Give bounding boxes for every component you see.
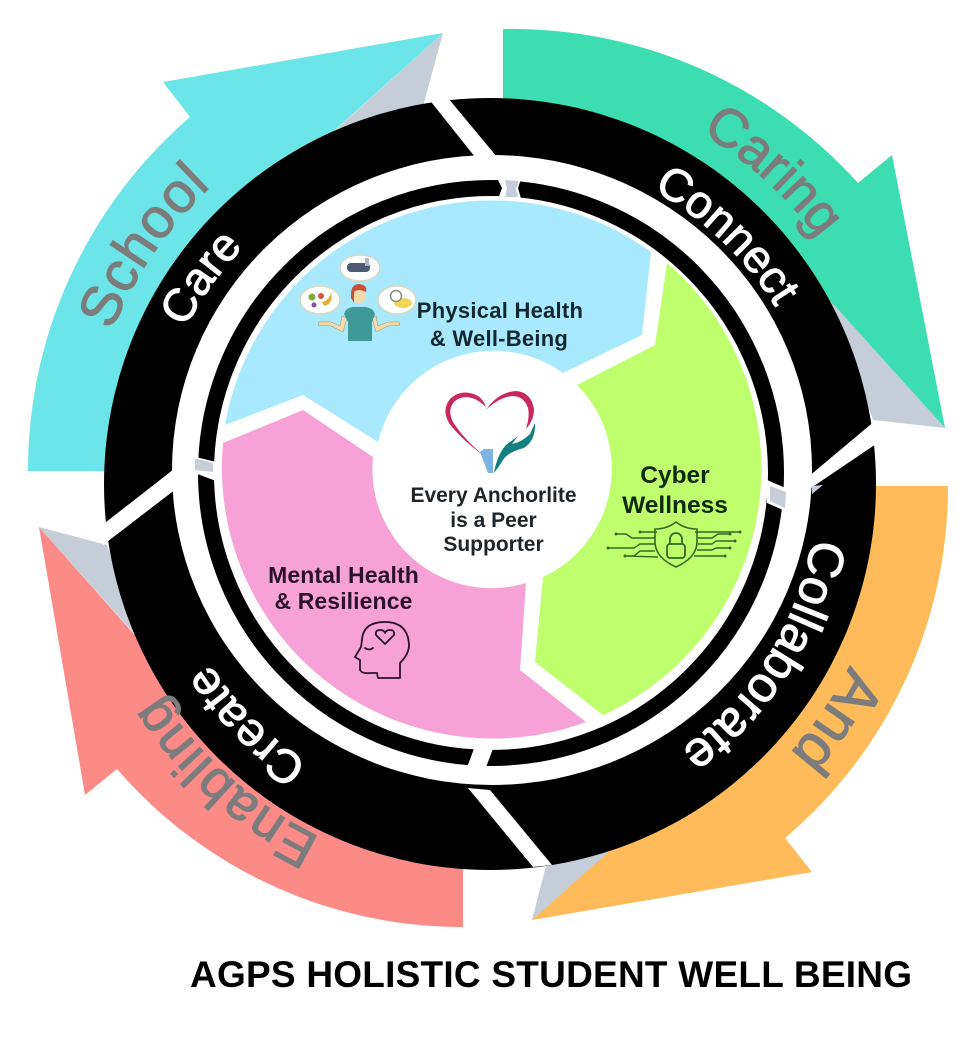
label: Physical Health & Well-Being: & Well-Being — [430, 326, 568, 351]
label: And: And — [792, 664, 878, 779]
label: Collaborate: Collaborate — [686, 544, 844, 766]
label: Cyber Wellness: Cyber — [640, 462, 710, 489]
icon: head with heart — [355, 622, 409, 678]
label: Enabling: Enabling — [137, 695, 318, 870]
label: Connect: Connect — [660, 168, 798, 308]
panel: Cyber Wellness — [535, 263, 761, 715]
title: AGPS HOLISTIC STUDENT WELL BEING — [190, 954, 912, 995]
arrow: Caring (green) — [503, 29, 945, 428]
label: centre statement — [410, 484, 577, 556]
label: Physical Health & Well-Being — [417, 298, 583, 351]
label: centre statement: Supporter — [443, 533, 544, 556]
label: centre statement: is a Peer — [450, 509, 537, 532]
label: Mental Health & Resilience: Mental Health — [268, 562, 419, 588]
arrow: School (cyan) — [28, 33, 443, 471]
arrow: And (orange) — [532, 486, 948, 920]
panel: Mental Health & Resilience — [222, 410, 586, 738]
label: Cyber Wellness — [622, 462, 728, 519]
label: Care: Care — [163, 236, 240, 322]
arrow: Enabling (red) — [39, 527, 463, 927]
label: Mental Health & Resilience: & Resilience — [274, 588, 412, 614]
label: Caring: Caring — [710, 108, 840, 240]
label: Physical Health & Well-Being: Physical Health — [417, 298, 583, 323]
icon: heart held by a hand — [445, 391, 535, 473]
inner thin black ring — [192, 176, 790, 770]
icon: person with thought clouds — [300, 255, 416, 341]
icon: shield with circuit lines — [606, 522, 742, 567]
outer black ring — [101, 98, 882, 870]
label: Create: Create — [193, 668, 301, 784]
label: Mental Health & Resilience — [268, 562, 419, 614]
panel: Physical Health & Well-Being — [225, 200, 651, 442]
label: Cyber Wellness: Wellness — [622, 492, 728, 519]
label: centre statement: Every Anchorlite — [410, 484, 577, 507]
label: School: School — [80, 159, 209, 326]
